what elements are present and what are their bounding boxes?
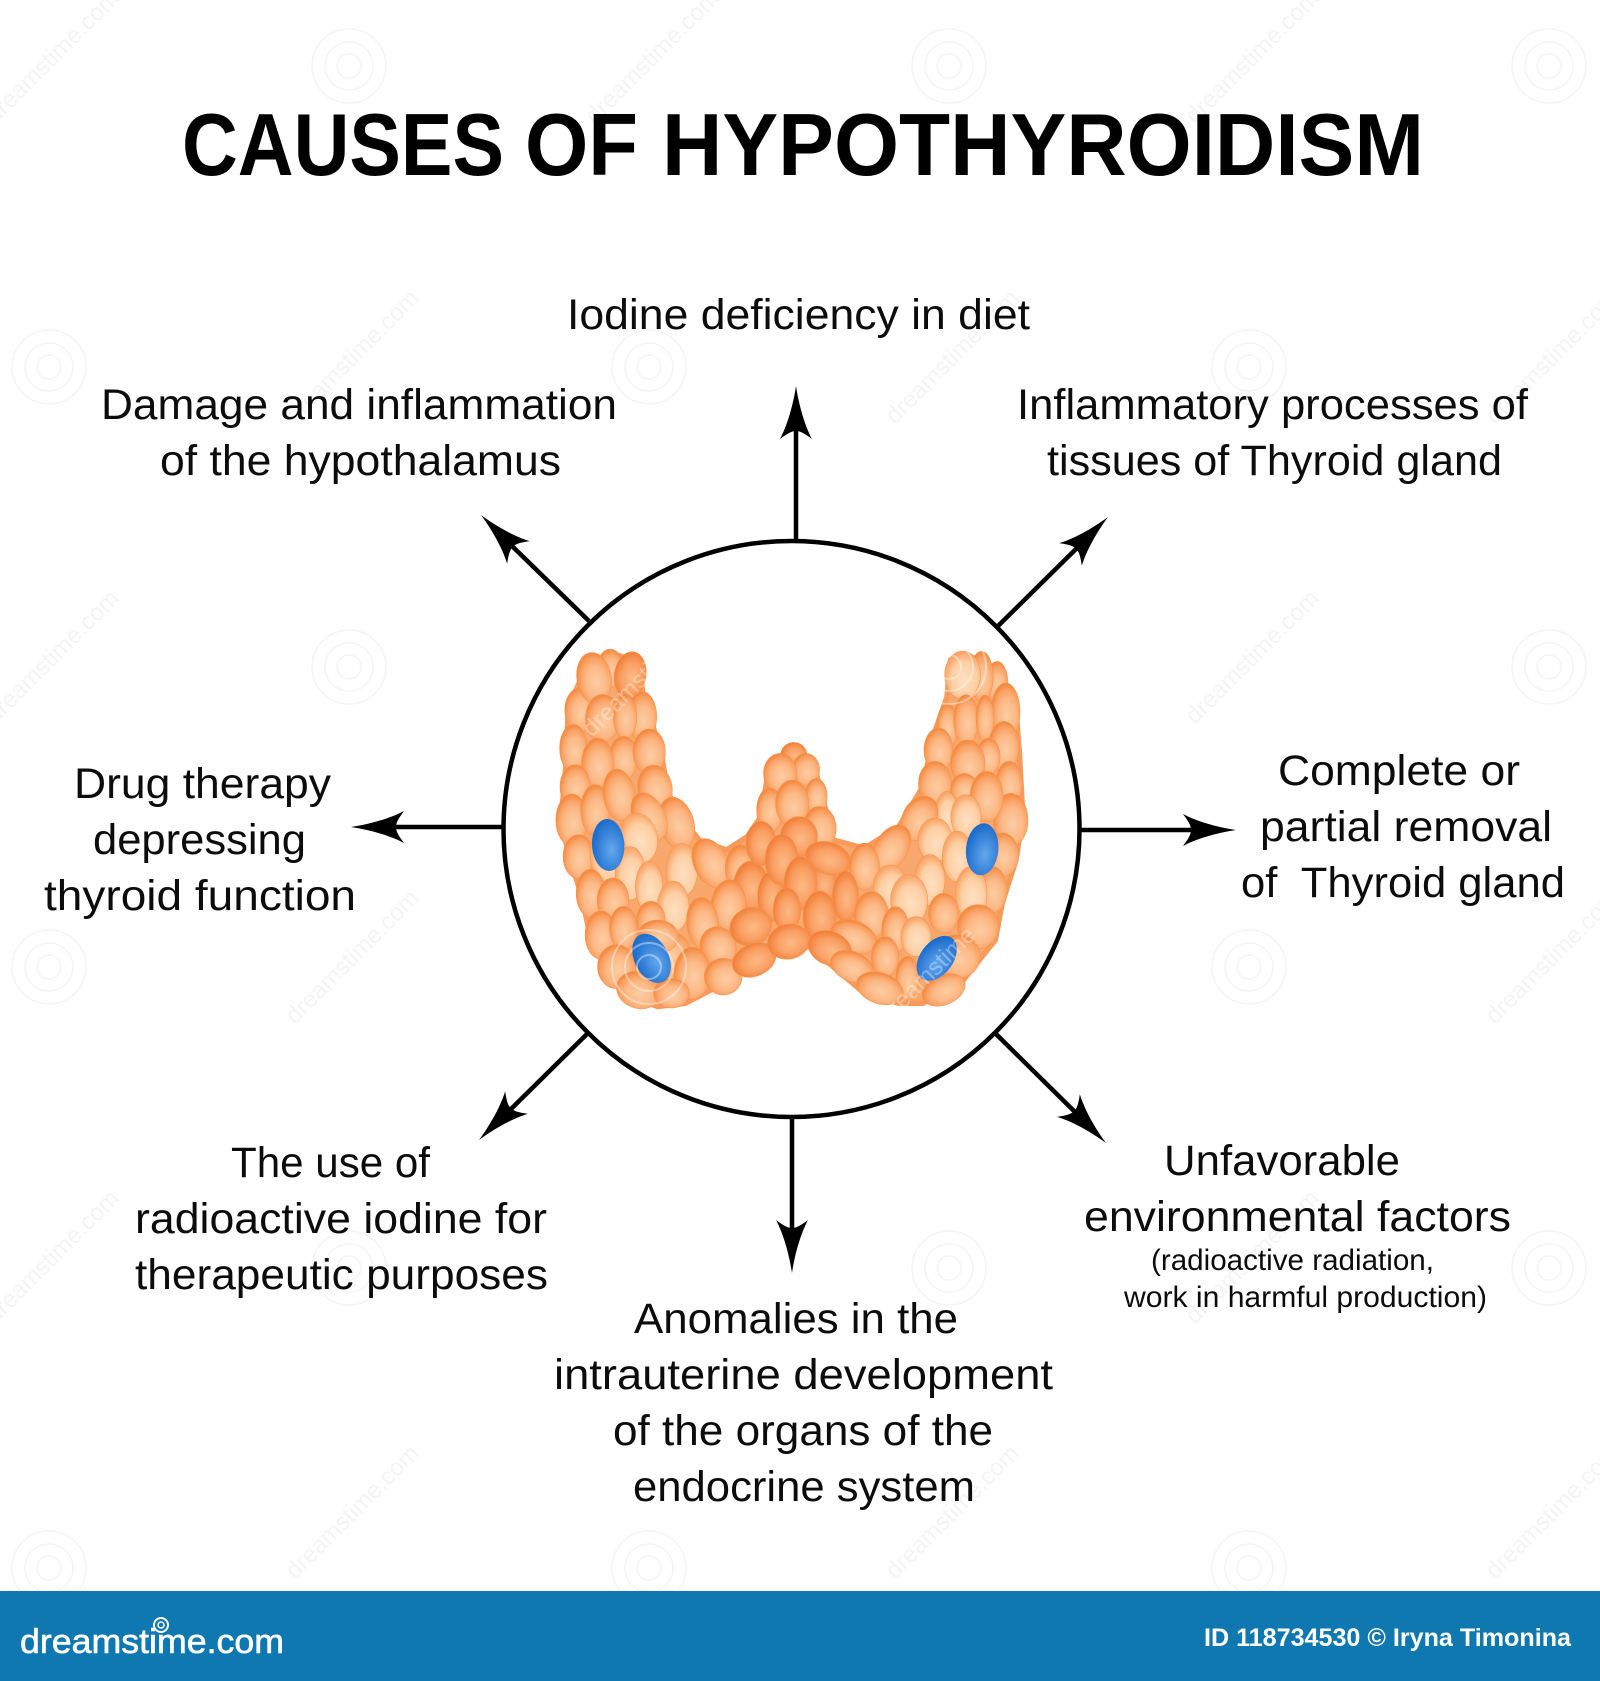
arrow: up-left	[470, 504, 589, 621]
watermark pattern: dreamstime.com	[280, 885, 425, 1029]
watermark pattern: dreamstime.com	[1180, 585, 1325, 729]
watermark pattern: dreamstime.com	[880, 285, 1025, 429]
arrow: right	[1081, 814, 1236, 846]
watermark over thyroid: dreamstime	[577, 634, 685, 742]
label: inflammatory processes: tissues of Thyroid gland	[1047, 437, 1502, 485]
footer logo: dreamstime: dreamstime.com	[20, 1623, 284, 1661]
title: HYPOTHYROIDISM	[662, 95, 1424, 194]
thyroid: blue nodules	[591, 818, 1001, 989]
label: radioactive iodine: therapeutic purposes	[135, 1251, 548, 1299]
label: removal of thyroid: Complete or	[1278, 747, 1520, 795]
label: inflammatory processes: Inflammatory processes of	[1017, 381, 1529, 429]
label: environmental factors: environmental factors	[1084, 1193, 1511, 1241]
label: inflammatory processes	[1017, 381, 1529, 485]
label: drug therapy: Drug therapy	[74, 760, 332, 808]
title: CAUSES	[182, 95, 504, 194]
label: intrauterine anomalies: Anomalies in the	[634, 1295, 958, 1343]
thyroid: right lobe lobules	[802, 651, 1028, 1013]
watermark pattern: dreamstime.com	[280, 285, 425, 429]
label: drug therapy: depressing	[93, 816, 306, 864]
thyroid: isthmus lobules	[746, 742, 856, 964]
label: hypothalamus: Damage and inflammation	[101, 381, 617, 429]
circle	[504, 541, 1080, 1117]
title: OF	[525, 95, 638, 194]
watermark over thyroid	[577, 630, 986, 1029]
label: environmental factors	[1084, 1137, 1511, 1314]
arrow: up-right	[998, 506, 1119, 626]
label: radioactive iodine	[135, 1139, 548, 1299]
label: environmental factors: (radioactive radiation,	[1151, 1244, 1434, 1277]
label: intrauterine anomalies: endocrine system	[633, 1463, 975, 1511]
label: drug therapy: thyroid function	[44, 872, 356, 920]
title	[182, 95, 1424, 194]
footer bar	[0, 1591, 1600, 1681]
label: iodine deficiency: Iodine deficiency in diet	[567, 291, 1030, 339]
label: removal of thyroid: partial removal	[1260, 803, 1552, 851]
label: hypothalamus: of the hypothalamus	[160, 437, 561, 485]
label: intrauterine anomalies	[554, 1295, 1053, 1511]
label: environmental factors: Unfavorable	[1164, 1137, 1400, 1185]
label: drug therapy	[44, 760, 356, 920]
watermark pattern: dreamstime.com	[280, 1440, 425, 1584]
footer credit: ID 118734530 © Iryna Timonina	[1204, 1624, 1572, 1652]
arrow: up	[780, 386, 812, 539]
label: hypothalamus	[101, 381, 617, 485]
label: radioactive iodine: The use of	[231, 1139, 431, 1187]
arrow: down-left	[468, 1034, 587, 1151]
arrow: left	[351, 811, 503, 843]
thyroid: left lobe lobules	[556, 649, 785, 1015]
arrow: down-right	[996, 1034, 1117, 1154]
label: intrauterine anomalies: of the organs of the	[613, 1407, 993, 1455]
watermark pattern: dreamstime.com	[1180, 1185, 1325, 1329]
label: radioactive iodine: radioactive iodine for	[135, 1195, 547, 1243]
label: environmental factors: work in harmful production)	[1123, 1281, 1487, 1314]
watermark pattern: dreamstime.com	[880, 1440, 1025, 1584]
label: removal of thyroid: of Thyroid gland	[1241, 859, 1565, 907]
arrow: down	[776, 1118, 808, 1273]
thyroid gland illustration	[556, 649, 1028, 1015]
label: removal of thyroid	[1241, 747, 1565, 907]
label: intrauterine anomalies: intrauterine development	[554, 1351, 1053, 1399]
watermark over thyroid: dreamstime	[873, 921, 981, 1029]
